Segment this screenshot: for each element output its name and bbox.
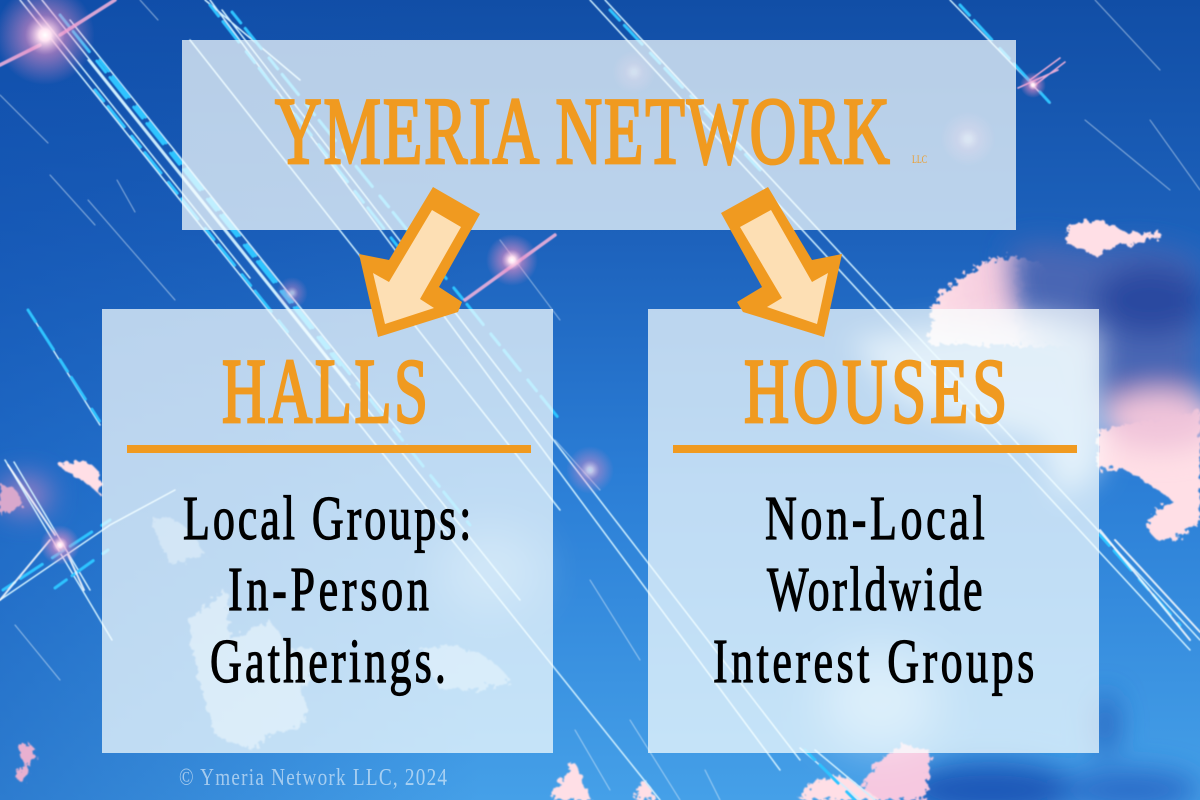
arrow: network to halls [359, 187, 480, 337]
heading: Houses: HOUSES [744, 341, 1007, 443]
text block: Houses description: Non-Local [765, 483, 985, 553]
copyright notice: © Ymeria Network LLC, 2024 [179, 764, 447, 791]
text block: Halls description: Local Groups: [183, 483, 471, 553]
title: YMERIA NETWORK [275, 79, 890, 184]
clouds [0, 220, 1200, 800]
text block: Halls description: Gatherings. [210, 626, 446, 696]
text block: Houses description: Worldwide [767, 554, 983, 624]
text block: Houses description: Interest Groups [713, 626, 1034, 696]
heading: Halls: HALLS [222, 341, 428, 442]
panel: Halls [102, 309, 553, 753]
divider: Houses [673, 445, 1077, 453]
panel: Ymeria Network header [182, 40, 1016, 230]
text block: Halls description: In-Person [228, 554, 429, 624]
lens flares [0, 0, 1046, 565]
LLC mark: LLC [912, 152, 927, 166]
panel: Houses [648, 309, 1099, 753]
divider: Halls [127, 445, 531, 453]
text block: Houses description [713, 483, 1034, 696]
text block: Halls description [183, 483, 471, 696]
arrow: network to houses [721, 187, 842, 337]
